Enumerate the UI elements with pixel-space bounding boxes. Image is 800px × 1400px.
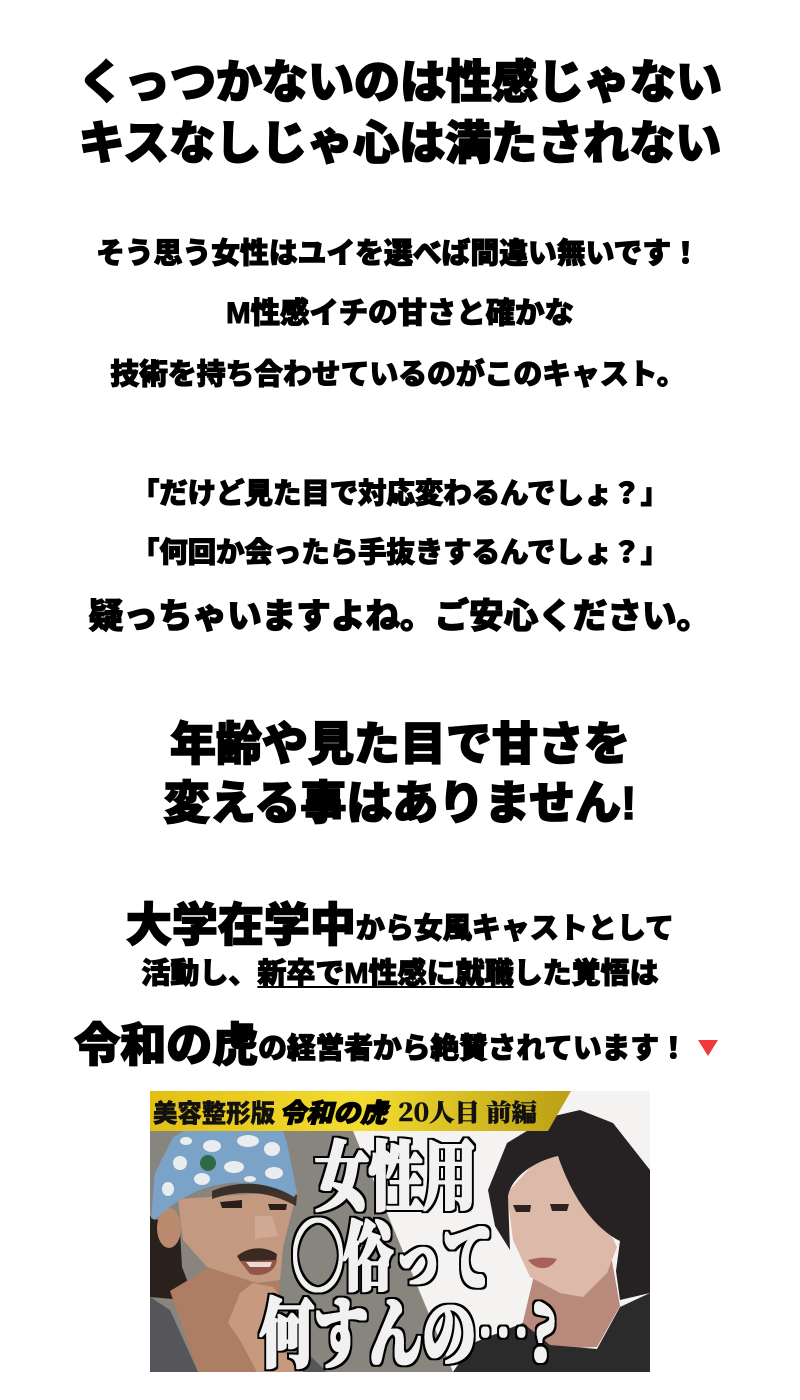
text block: doubts <box>88 478 711 636</box>
text block: doubts: 疑っちゃいますよね。ご安心ください。 <box>89 598 711 636</box>
banner: 令和の虎 <box>279 1093 391 1130</box>
right man <box>453 1110 650 1372</box>
headline: thumbnail title: 女性用 <box>315 1117 477 1226</box>
text block: background <box>74 899 688 1071</box>
heading: promise <box>163 718 636 829</box>
left man <box>150 1131 327 1372</box>
icon: red down triangle <box>698 1040 718 1056</box>
banner: 美容整形版 <box>153 1094 275 1130</box>
text block: intro <box>96 237 700 391</box>
title <box>78 56 722 169</box>
text block: background: 活動し、新卒でM性感に就職した覚悟は <box>141 958 659 990</box>
heading: promise: 変える事はありません! <box>164 777 636 829</box>
banner: 20人目 前編 <box>398 1093 537 1128</box>
headline: thumbnail title <box>260 1117 557 1383</box>
banner <box>150 1091 571 1131</box>
headline: thumbnail title: ◯俗って <box>293 1197 493 1306</box>
heading: promise: 年齢や見た目で甘さを <box>170 718 630 770</box>
title: キスなしじゃ心は満たされない <box>79 117 721 169</box>
title: くっつかないのは性感じゃない <box>78 56 722 108</box>
text block: intro: M性感イチの甘さと確かな <box>226 297 574 330</box>
text block: doubts: 「だけど見た目で対応変わるんでしょ？」 <box>131 478 669 510</box>
text block: intro: そう思う女性はユイを選べば間違い無いです！ <box>96 238 700 270</box>
thumbnail: video still <box>150 1091 650 1372</box>
text block: doubts: 「何回か会ったら手抜きするんでしょ？」 <box>131 537 669 569</box>
text block: intro: 技術を持ち合わせているのがこのキャスト。 <box>110 359 686 391</box>
text block: background: 大学在学中から女風キャストとして <box>126 899 674 951</box>
text block: background: 令和の虎の経営者から絶賛されています！ <box>74 1019 688 1071</box>
